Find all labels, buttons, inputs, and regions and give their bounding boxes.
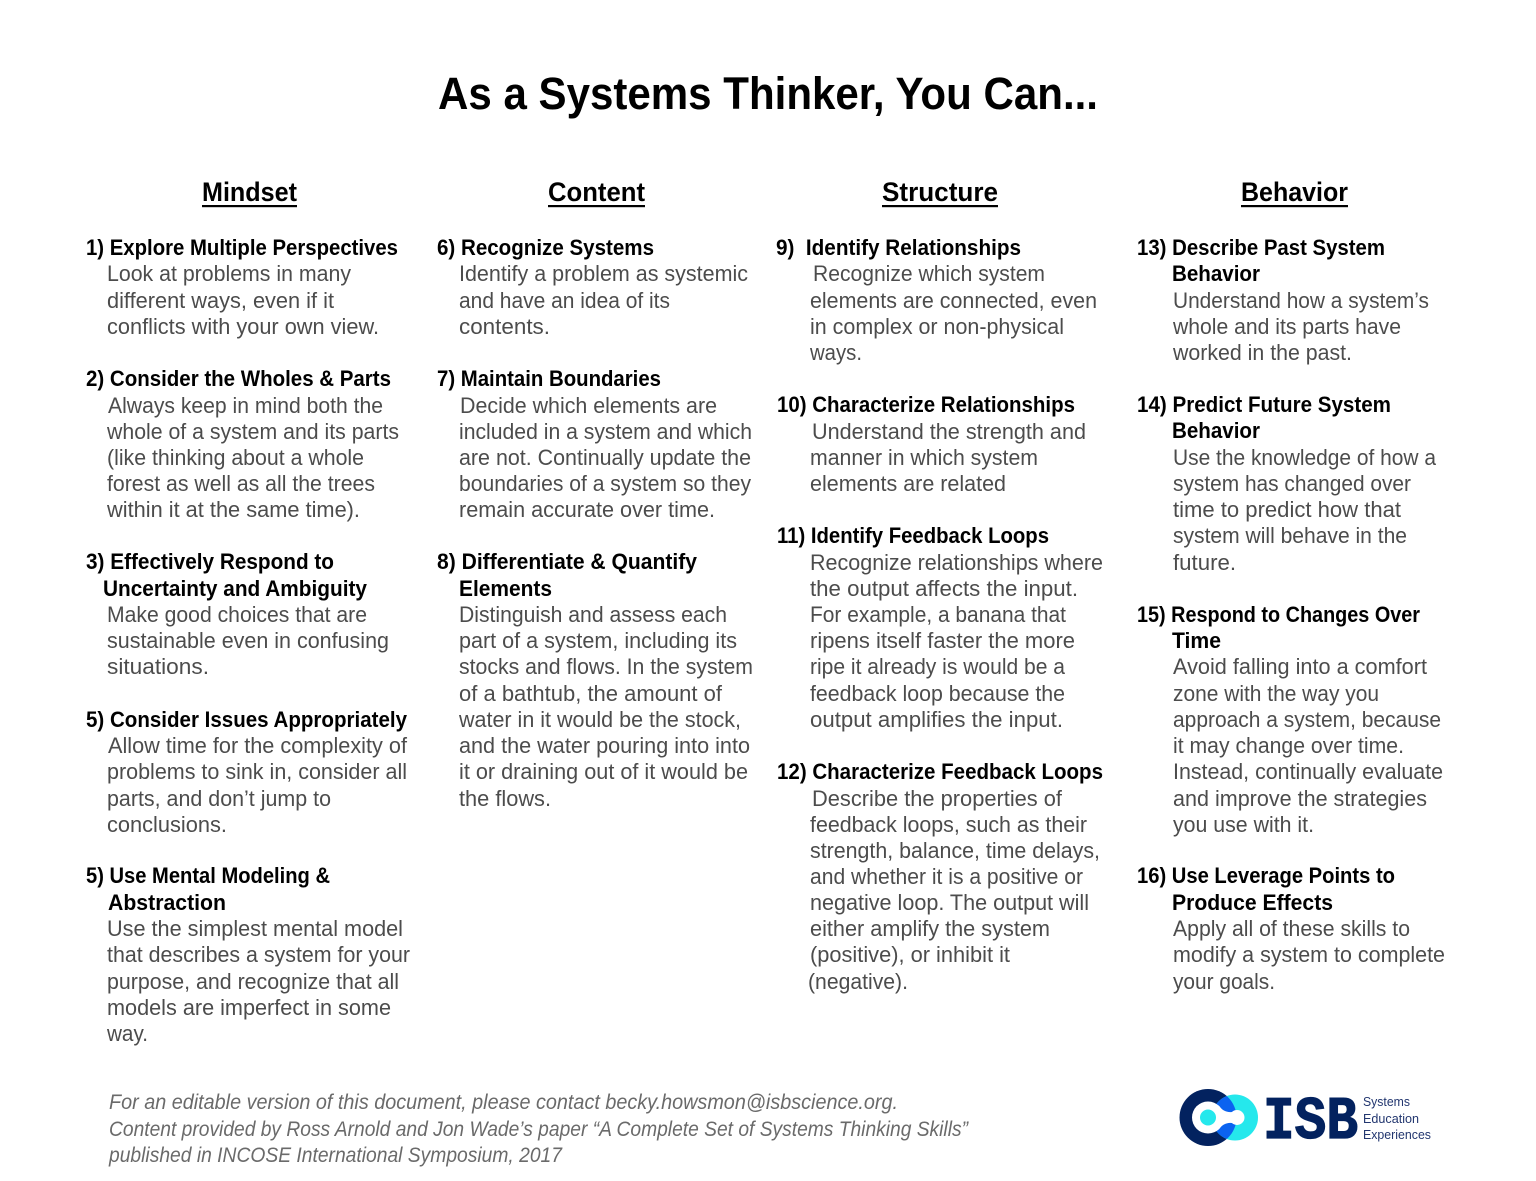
skill 8: part of a system, including its (459, 628, 737, 653)
skill 10: manner in which system (810, 445, 1038, 470)
skill 14 (1137, 392, 1437, 575)
skill 4: parts, and don’t jump to (107, 786, 331, 811)
skill 11: output amplifies the input. (810, 707, 1063, 732)
skill 8: the flows. (459, 786, 551, 811)
skill 10: 10) Characterize Relationships (777, 392, 1075, 417)
skill 12: feedback loops, such as their (810, 812, 1087, 837)
logo tagline: Systems (1363, 1095, 1410, 1109)
skill 2: 2) Consider the Wholes & Parts (86, 366, 391, 391)
skill 15: 15) Respond to Changes Over (1137, 602, 1420, 627)
skill 4 (86, 707, 408, 837)
skill 1: different ways, even if it (107, 288, 334, 313)
skill 5: Use the simplest mental model (107, 916, 403, 941)
logo tagline: Experiences (1363, 1128, 1431, 1142)
skill 13: Understand how a system’s (1173, 288, 1429, 313)
skill 2 (86, 366, 399, 522)
skill 3 (86, 549, 389, 679)
skill 8: and the water pouring into into (459, 733, 750, 758)
skill 13: 13) Describe Past System (1137, 235, 1385, 260)
panel: content column (437, 177, 753, 811)
skill 11: the output affects the input. (810, 576, 1078, 601)
skill 12: strength, balance, time delays, (810, 838, 1100, 863)
skill 2: (like thinking about a whole (107, 445, 364, 470)
skill 2: whole of a system and its parts (106, 419, 399, 444)
skill 1: conflicts with your own view. (107, 314, 379, 339)
skill 3: situations. (107, 654, 209, 679)
skill 15: zone with the way you (1173, 681, 1379, 706)
logo tagline (1363, 1095, 1431, 1142)
skill 15 (1137, 602, 1443, 837)
panel: structure column (776, 177, 1103, 994)
skill 14: 14) Predict Future System (1137, 392, 1391, 417)
skill 8: it or draining out of it would be (459, 759, 748, 784)
skill 4: problems to sink in, consider all (107, 759, 407, 784)
skill 16 (1137, 863, 1445, 994)
skill 12 (777, 759, 1103, 994)
skill 3: sustainable even in confusing (107, 628, 389, 653)
skill 13 (1137, 235, 1429, 365)
skill 6 (437, 235, 748, 339)
skill 9: ways. (809, 340, 862, 365)
skill 10: Understand the strength and (812, 419, 1086, 444)
skill 6: 6) Recognize Systems (437, 235, 654, 260)
skill 3: Uncertainty and Ambiguity (103, 576, 368, 601)
skill 8: 8) Differentiate & Quantify (437, 549, 698, 574)
skill 5: purpose, and recognize that all (107, 969, 399, 994)
skill 14: time to predict how that (1173, 497, 1401, 522)
skill 9: elements are connected, even (810, 288, 1097, 313)
skill 14: system has changed over (1173, 471, 1411, 496)
skill 13: whole and its parts have (1172, 314, 1401, 339)
skill 2: Always keep in mind both the (108, 393, 383, 418)
heading: Content: Content (548, 177, 645, 207)
skill 10: elements are related (810, 471, 1006, 496)
skill 16: Apply all of these skills to (1173, 916, 1410, 941)
skill 5: that describes a system for your (107, 942, 410, 967)
skill 15: approach a system, because (1173, 707, 1441, 732)
title: As a Systems Thinker, You Can... (438, 68, 1098, 119)
skill 15: Instead, continually evaluate (1173, 759, 1443, 784)
footer note: Content provided by Ross Arnold and Jon Wade’s paper “A Complete Set of Systems Thinking Skills” (109, 1118, 969, 1141)
skill 5: way. (106, 1021, 148, 1046)
skill 16: 16) Use Leverage Points to (1137, 863, 1395, 888)
skill 1: 1) Explore Multiple Perspectives (86, 235, 398, 260)
skill 8: stocks and flows. In the system (459, 654, 753, 679)
logo tagline: Education (1363, 1112, 1419, 1126)
skill 11: feedback loop because the (810, 681, 1065, 706)
skill 2: forest as well as all the trees (107, 471, 375, 496)
footer note (108, 1091, 969, 1167)
skill 12: (positive), or inhibit it (810, 942, 1010, 967)
skill 15: and improve the strategies (1173, 786, 1427, 811)
footer note: published in INCOSE International Symposium, 2017 (108, 1144, 563, 1167)
skill 5: models are imperfect in some (107, 995, 391, 1020)
skill 1: Look at problems in many (107, 261, 351, 286)
skill 3: Make good choices that are (107, 602, 367, 627)
skill 12: either amplify the system (810, 916, 1050, 941)
skill 14: system will behave in the (1173, 523, 1407, 548)
skill 9 (776, 235, 1097, 365)
skill 11: 11) Identify Feedback Loops (777, 523, 1049, 548)
skill 10 (777, 392, 1086, 496)
skill 12: and whether it is a positive or (810, 864, 1083, 889)
skill 9: in complex or non-physical (810, 314, 1064, 339)
skill 4: Allow time for the complexity of (108, 733, 408, 758)
skill 14: future. (1173, 550, 1236, 575)
skill 7: boundaries of a system so they (459, 471, 751, 496)
skill 8 (437, 549, 753, 811)
skill 16: your goals. (1173, 969, 1275, 994)
skill 5: Abstraction (108, 890, 226, 915)
skill 11: Recognize relationships where (810, 550, 1103, 575)
panel: behavior column (1137, 177, 1445, 994)
skill 3: 3) Effectively Respond to (86, 549, 334, 574)
logo: ISB (1180, 1089, 1430, 1146)
skill 7: included in a system and which (459, 419, 752, 444)
skill 9: Recognize which system (813, 261, 1045, 286)
skill 4: 5) Consider Issues Appropriately (86, 707, 408, 732)
skill 15: Time (1172, 628, 1221, 653)
skill 1 (86, 235, 398, 339)
panel: mindset column (86, 177, 410, 1046)
skill 16: Produce Effects (1172, 890, 1333, 915)
skill 7: 7) Maintain Boundaries (437, 366, 661, 391)
skill 16: modify a system to complete (1173, 942, 1445, 967)
heading: Structure: Structure (882, 177, 998, 207)
skill 11 (777, 523, 1103, 732)
skill 6: contents. (459, 314, 550, 339)
skill 7 (437, 366, 752, 522)
skill 14: Behavior (1172, 418, 1260, 443)
heading: Mindset: Mindset (202, 177, 297, 207)
skill 15: you use with it. (1173, 812, 1314, 837)
skill 7: are not. Continually update the (459, 445, 751, 470)
skill 12: Describe the properties of (812, 786, 1063, 811)
skill 15: Avoid falling into a comfort (1173, 654, 1427, 679)
skill 13: worked in the past. (1172, 340, 1352, 365)
skill 8: Elements (459, 576, 552, 601)
skill 5 (86, 863, 410, 1046)
skill 2: within it at the same time). (106, 497, 360, 522)
skill 6: and have an idea of its (459, 288, 670, 313)
skill 12: negative loop. The output will (810, 890, 1089, 915)
skill 5: 5) Use Mental Modeling & (86, 863, 330, 888)
skill 11: ripe it already is would be a (810, 654, 1066, 679)
skill 8: Distinguish and assess each (459, 602, 727, 627)
skill 9: 9) Identify Relationships (776, 235, 1021, 260)
skill 8: water in it would be the stock, (458, 707, 741, 732)
skill 4: conclusions. (107, 812, 227, 837)
skill 6: Identify a problem as systemic (459, 261, 748, 286)
footer note: For an editable version of this document, please contact becky.howsmon@isbscience.org. (109, 1091, 898, 1114)
skill 12: (negative). (808, 969, 908, 994)
icon: infinity rings (1180, 1089, 1258, 1146)
logo wordmark: ISB (1263, 1089, 1358, 1157)
skill 11: For example, a banana that (810, 602, 1066, 627)
skill 15: it may change over time. (1173, 733, 1404, 758)
skill 7: remain accurate over time. (459, 497, 715, 522)
skill 14: Use the knowledge of how a (1173, 445, 1437, 470)
skill 8: of a bathtub, the amount of (459, 681, 723, 706)
skill 13: Behavior (1172, 261, 1260, 286)
skill 12: 12) Characterize Feedback Loops (777, 759, 1103, 784)
skill 11: ripens itself faster the more (810, 628, 1075, 653)
heading: Behavior: Behavior (1241, 177, 1348, 207)
skill 7: Decide which elements are (460, 393, 717, 418)
